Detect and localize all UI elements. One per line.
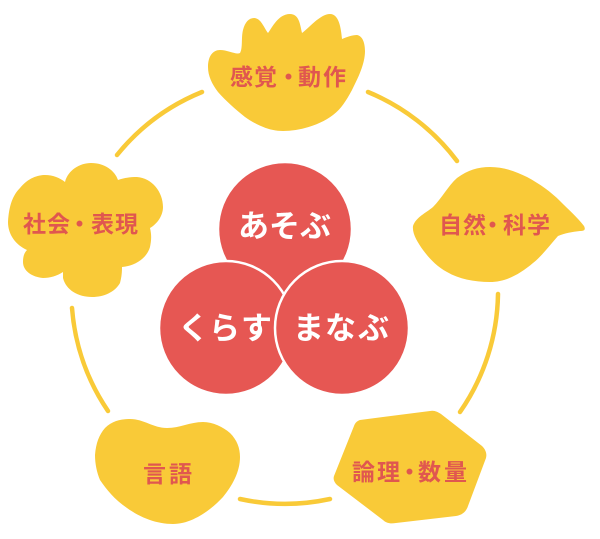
circle: まなぶ (275, 261, 409, 395)
label: 社会・表現 (23, 211, 138, 237)
label: 論理・数量 (352, 459, 467, 485)
label: 感覚・動作 (230, 64, 346, 90)
blob: 社会・表現 (8, 163, 163, 297)
label: あそぶ (238, 209, 331, 244)
label: まなぶ (293, 311, 389, 346)
label: 言語 (143, 461, 192, 487)
blob: 言語 (95, 419, 240, 524)
circle: くらす (159, 261, 293, 395)
blob: 自然・科学 (413, 167, 585, 282)
label: くらす (178, 311, 272, 346)
connecting ring arcs (72, 92, 498, 504)
blob: 感覚・動作 (208, 14, 365, 131)
circle: あそぶ (218, 162, 352, 296)
label: 自然・科学 (439, 212, 550, 238)
blob: 論理・数量 (334, 411, 486, 523)
